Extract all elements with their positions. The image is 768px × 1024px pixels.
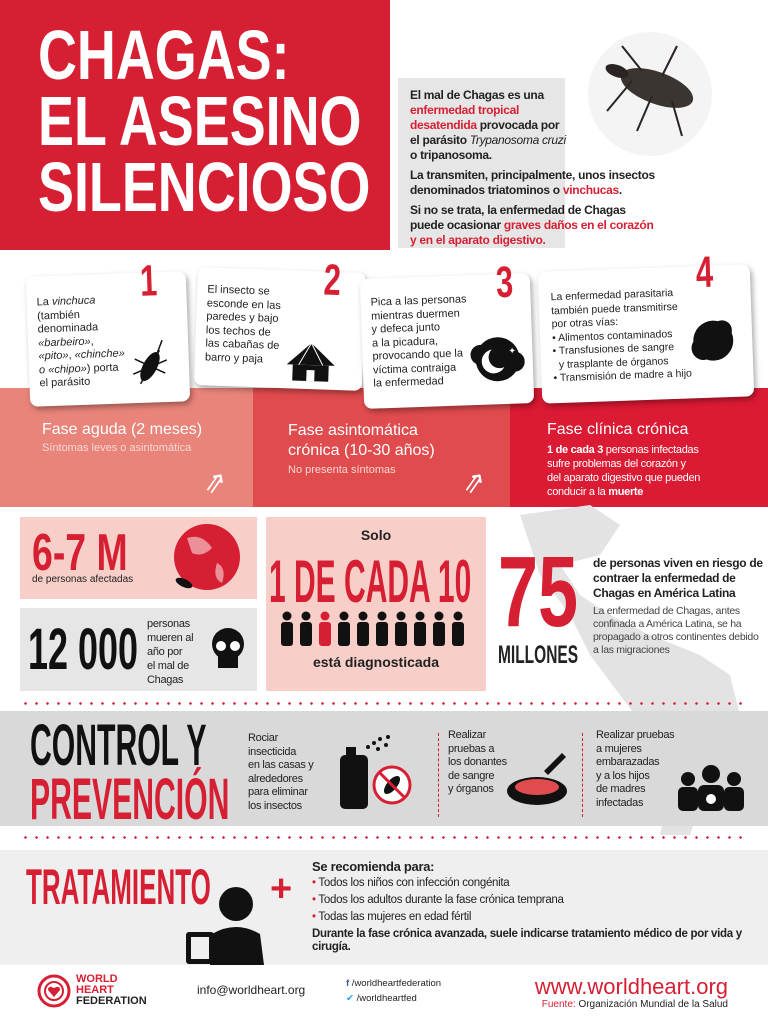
footer social: f /worldheartfederation	[346, 978, 441, 989]
card 1: el parásito	[39, 376, 90, 389]
title	[38, 16, 370, 226]
text: denominados triatominos o vinchucas. Si no se trata, la enfermedad de Chagas	[410, 183, 626, 217]
heading: TRATAMIENTO	[26, 859, 211, 915]
card 4: • Transfusiones de sangre	[552, 341, 674, 357]
stat box: 12 000: personas	[147, 618, 190, 630]
card 3: provocando que la	[372, 347, 463, 363]
phase: clinica: conducir a la muerte	[547, 486, 643, 498]
footer email: info@worldheart.org	[197, 983, 305, 997]
card 4: y trasplante de órganos	[559, 355, 669, 371]
icon: plus: +	[270, 868, 292, 910]
footer logo: WORLD	[76, 973, 118, 985]
phase: asintomatica: crónica (10-30 años)	[288, 442, 435, 459]
icon: moon cloud	[470, 337, 525, 382]
stat box: 6-7 M: de personas afectadas	[32, 574, 133, 585]
footer social: ✔ /worldheartfed	[346, 993, 417, 1004]
phase bands	[0, 388, 768, 507]
footer source: Fuente: Organización Mundial de la Salud	[542, 999, 728, 1010]
icon: blood dish	[507, 753, 567, 805]
stat box: 1 de cada 10: Solo	[361, 527, 391, 543]
panel: control y prevencion: para eliminar	[248, 786, 308, 798]
text: recommendations: Durante la fase crónica avanzada, suele indicarse tratamiento médico de por vida y cirugía.	[312, 928, 742, 953]
panel: control y prevencion: en las casas y	[248, 759, 314, 771]
card 3: y defeca junto	[371, 321, 440, 336]
card 1: La vinchuca	[36, 294, 96, 308]
arrow 2: ⇗	[459, 465, 488, 500]
panel: control y prevencion: los insectos	[248, 800, 302, 812]
panel: control y prevencion: embarazadas	[596, 756, 659, 768]
icon: people row	[281, 612, 464, 646]
text: recommendations	[312, 859, 742, 953]
stat box: 12 000: 12 000	[28, 617, 138, 682]
footer url: www.worldheart.org	[535, 974, 728, 999]
footer logo	[38, 973, 147, 1008]
text: recommendations: • Todos los adultos durante la fase crónica temprana	[312, 894, 564, 906]
stat box: 6-7 M	[20, 517, 257, 599]
map background	[520, 505, 739, 835]
icon: globe	[174, 524, 240, 590]
card 1: «pito», «chinche»	[38, 347, 125, 362]
panel: control y prevencion: a mujeres	[596, 742, 642, 754]
card 1: o «chipo») porta	[39, 361, 119, 376]
text: desatendida provocada por	[410, 118, 559, 132]
panel: tratamiento	[0, 850, 768, 965]
title: EL ASESINO	[38, 82, 361, 160]
footer logo: FEDERATION	[76, 995, 147, 1007]
panel: control y prevencion: y órganos	[448, 783, 494, 795]
panel: control y prevencion: de madres	[596, 783, 645, 795]
title: CHAGAS:	[38, 16, 290, 94]
card 4: • Transmisión de madre a hijo	[553, 367, 692, 384]
phase: aguda: Fase aguda (2 meses)	[42, 421, 202, 438]
card 2: los techos de	[206, 324, 271, 338]
card 4: también puede transmitirse	[551, 300, 678, 317]
text: El mal de Chagas es una	[410, 88, 544, 102]
card 2: paredes y bajo	[206, 310, 279, 325]
panel: control y prevencion: Realizar pruebas	[596, 729, 674, 741]
stat box: 1 de cada 10: está diagnosticada	[313, 654, 439, 670]
card 3: Pica a las personas	[370, 293, 467, 309]
stat box: 12 000: año por	[147, 646, 182, 658]
text: el parásito Trypanosoma cruzi	[410, 133, 566, 147]
stat box: 1 de cada 10	[266, 517, 486, 691]
text: o tripanosoma. La transmiten, principalmente, unos insectos	[410, 148, 655, 182]
text: puede ocasionar graves daños en el corazón	[410, 218, 654, 232]
phase: clinica: Fase clínica crónica	[547, 421, 688, 438]
icon: skull	[212, 628, 244, 668]
heading	[30, 713, 229, 832]
card 1: 1	[139, 256, 158, 306]
stat box: 6-7 M: 6-7 M	[32, 524, 128, 582]
text: y en el aparato digestivo.	[410, 233, 546, 247]
phase: asintomatica: Fase asintomática	[288, 422, 418, 439]
panel: control y prevencion: pruebas a	[448, 742, 494, 754]
card 2: El insecto se	[207, 283, 270, 298]
card 3: a la picadura,	[372, 335, 438, 349]
text: 75 millones description: de personas viven en riesgo de contraer la enfermedad de Chagas en América Latina	[593, 556, 763, 600]
stat box: 12 000: el mal de	[147, 660, 189, 672]
icon: bug photo	[588, 32, 712, 156]
card 3: la enfermedad	[373, 375, 444, 390]
title block	[0, 0, 390, 250]
panel: control y prevencion: alrededores	[248, 772, 303, 784]
panel: control y prevencion: Realizar	[448, 729, 486, 741]
text: enfermedad tropical	[410, 103, 519, 117]
stat box: 12 000: mueren al	[147, 632, 193, 644]
title: SILENCIOSO	[38, 148, 370, 226]
card 4: por otras vías:	[551, 316, 618, 330]
panel: control y prevencion: los donantes	[448, 756, 507, 768]
phase: aguda: Síntomas leves o asintomática	[42, 442, 191, 454]
text: 75 millones description	[593, 556, 763, 656]
footer social	[346, 978, 441, 1004]
panel: control y prevencion: y a los hijos	[596, 770, 650, 782]
panel: control y prevencion: Rociar	[248, 732, 278, 744]
phase: asintomatica	[288, 422, 435, 476]
heading: CONTROL Y	[30, 713, 207, 778]
arrow 1: ⇗	[200, 465, 229, 500]
text: recommendations: Se recomienda para:	[312, 859, 434, 874]
card 2	[194, 267, 366, 391]
intro text box	[398, 78, 565, 248]
card 4: 4	[695, 248, 714, 297]
card 2: esconde en las	[207, 297, 281, 312]
card 2: las cabañas de	[205, 337, 280, 352]
phase: clinica	[547, 421, 700, 498]
card 1: denominada	[37, 321, 98, 335]
text: recommendations: • Todas las mujeres en edad fértil	[312, 911, 471, 923]
card 3: víctima contraiga	[373, 361, 456, 376]
card 3: 3	[495, 258, 514, 307]
text: 75 millones description: La enfermedad de Chagas, antes confinada a América Latina, se ha propagado a otros continentes debido a las migraciones	[593, 605, 759, 656]
stat box: 12 000: Chagas	[147, 674, 183, 686]
stat: 75 millones: 75	[498, 536, 578, 648]
icon: moon cloud: ✦	[508, 346, 517, 356]
icon: spray	[340, 735, 412, 809]
card 4: • Alimentos contaminados	[552, 328, 673, 344]
card 1: (también	[37, 308, 80, 322]
icon: parasite blob	[692, 320, 734, 361]
icon: family	[678, 765, 744, 811]
stat: 75 millones: MILLONES	[498, 641, 578, 669]
icon: bug	[133, 340, 167, 384]
panel: control y prevencion: de sangre	[448, 770, 494, 782]
phase: clinica: 1 de cada 3 personas infectadas	[547, 444, 699, 456]
phase: aguda	[42, 421, 202, 454]
stat box: 1 de cada 10: 1 DE CADA 10	[269, 548, 471, 615]
card 1	[26, 271, 190, 407]
panel: control y prevencion	[0, 711, 768, 826]
heading: PREVENCIÓN	[30, 767, 229, 832]
footer logo: HEART	[76, 984, 114, 996]
card 4	[538, 264, 754, 404]
card 4: La enfermedad parasitaria	[550, 287, 673, 303]
panel: control y prevencion: infectadas	[596, 796, 643, 808]
icon: doctor	[186, 887, 264, 965]
icon: hut	[286, 344, 335, 382]
card 3: mientras duermen	[371, 307, 460, 322]
card 3	[360, 273, 534, 409]
phase: clinica: del aparato digestivo que pueden	[547, 472, 700, 484]
text: recommendations: • Todos los niños con infección congénita	[312, 877, 509, 889]
stat box: 12 000	[20, 608, 257, 691]
card 2: barro y paja	[205, 351, 263, 365]
card 1: «barbeiro»,	[38, 335, 94, 349]
phase: asintomatica: No presenta síntomas	[288, 464, 396, 476]
phase: clinica: sufre problemas del corazón y	[547, 458, 686, 470]
panel: control y prevencion: insecticida	[248, 746, 296, 758]
card 2: 2	[323, 256, 342, 305]
